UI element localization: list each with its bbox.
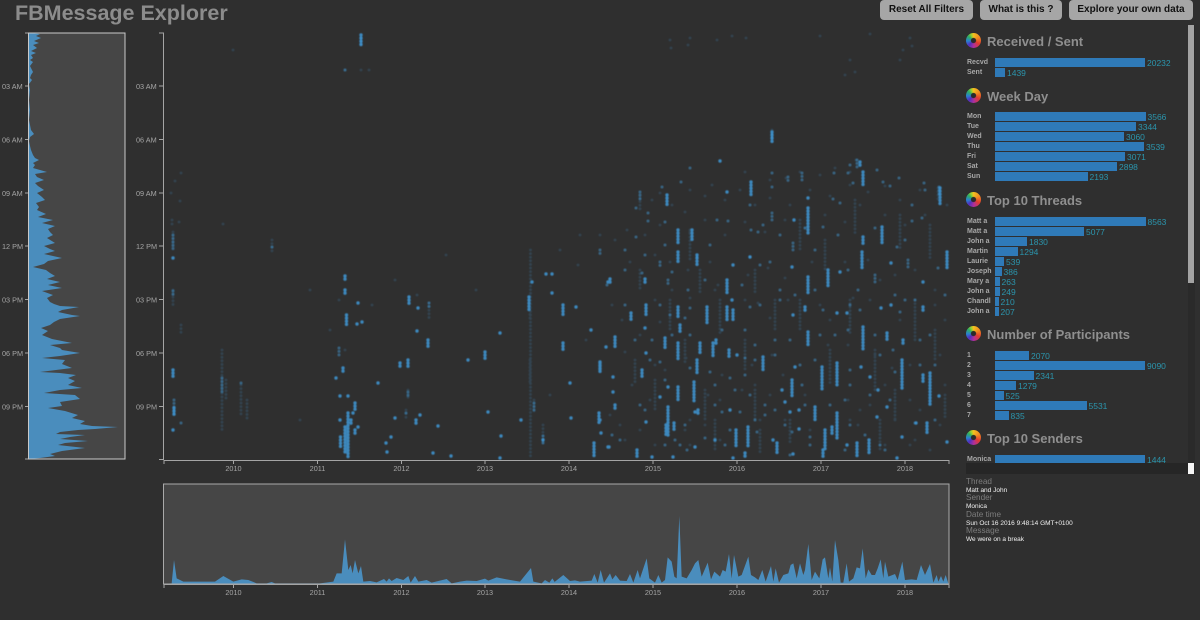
panel: filter charts: 9090 [1147,361,1166,371]
panel: filter charts: 7 [967,412,971,419]
dim scatter [171,34,947,457]
panel: filter charts: Matt a [967,218,987,225]
timeline x axis: 2016 [729,588,745,597]
heading: top 10 senders: Top 10 Senders [987,431,1083,446]
panel: filter charts: Sat [967,163,978,170]
main plot x axis: 2011 [310,464,325,473]
panel: message details [966,477,1073,543]
heading: number of participants: Number of Participants [987,327,1130,342]
button: explore your own data: Explore your own data [1077,4,1185,15]
value: sender: Monica [966,503,987,510]
panel: filter charts: 525 [1006,391,1020,401]
panel: filter charts: 2341 [1036,371,1054,381]
panel: filter charts: 5 [967,392,971,399]
label: thread: Thread [966,477,992,486]
panel: filter charts: 835 [1010,411,1025,421]
panel: filter charts: Matt a [967,228,987,235]
panel: filter charts: 1830 [1029,237,1048,247]
panel: filter charts: 5531 [1088,401,1107,411]
panel: filter charts: 2070 [1031,351,1050,361]
chart: week day [967,112,1166,182]
main plot x axis: 2010 [225,464,242,473]
main plot x axis: 2018 [897,464,913,473]
main plot y axis: 06 PM [136,349,157,358]
timeline x axis: 2011 [310,588,325,597]
button: what is this [980,0,1062,20]
icon: colour wheel week day [966,88,981,103]
panel: filter charts: 207 [1000,307,1015,317]
label: sender: Sender [966,493,992,502]
button: reset filters [880,0,973,20]
panel: filter charts: 3566 [1148,112,1166,122]
main plot y axis [136,33,164,460]
panel: filter charts: Martin [967,248,988,255]
panel: filter charts [966,33,1171,465]
main plot y axis: 12 PM [136,242,157,251]
histogram y axis: 09 PM [2,402,23,412]
panel: filter charts: Chandl [967,298,991,305]
chart: top 10 senders [967,455,1166,465]
panel: filter charts: 5077 [1086,227,1105,237]
icon: colour wheel participants [966,326,981,341]
main plot y axis: 09 AM [136,189,157,198]
panel: filter charts: Sent [967,69,982,76]
main plot x axis [164,460,949,473]
panel: filter charts: 386 [1004,267,1018,277]
main plot x axis: 2015 [645,464,661,473]
heading: week day: Week Day [987,89,1048,104]
main plot y axis: 09 PM [136,402,157,412]
panel: filter charts: 249 [1002,287,1016,297]
timeline x axis: 2010 [225,588,242,597]
panel: filter charts: Fri [967,153,976,160]
panel: filter charts: 263 [1002,277,1016,287]
panel: filter charts: 3060 [1126,132,1145,142]
main plot x axis: 2012 [393,464,410,473]
main plot x axis: 2013 [477,464,493,473]
chart: number of participants [967,351,1166,421]
panel: filter charts: 539 [1006,257,1020,267]
timeline x axis [164,584,949,597]
title: FBMessage Explorer [15,1,228,25]
histogram y axis: 03 PM [2,296,23,304]
horizontal scrollbar [966,463,1195,474]
main plot x axis: 2017 [813,464,829,473]
label: message: Message [966,526,999,535]
timeline x axis: 2013 [477,588,493,597]
panel: filter charts: Tue [967,123,979,130]
main scatter plot of messages [171,34,947,458]
medium scatter [173,38,945,455]
bright streaks [173,35,947,458]
main plot y axis: 03 AM [136,82,157,91]
button: explore your own data [1069,0,1193,20]
label: date time: Date time [966,510,1001,519]
panel: filter charts: 2 [967,362,971,369]
chart: top 10 threads [967,217,1166,317]
timeline x axis: 2014 [561,588,577,597]
icon: colour wheel senders [966,430,981,445]
panel: filter charts: 1 [967,352,971,359]
panel: filter charts: 1294 [1020,247,1038,257]
panel: filter charts: 210 [1000,297,1015,307]
panel: filter charts: Monica [967,456,991,463]
panel: filter charts: 6 [967,402,971,409]
timeline x axis: 2017 [813,588,829,597]
histogram y axis: 03 AM [2,82,23,91]
timeline x axis: 2015 [645,588,661,597]
icon: colour wheel received/sent [966,33,981,48]
histogram y axis: 12 PM [2,242,23,251]
panel: filter charts: Thu [967,143,980,150]
heading: received / sent: Received / Sent [987,34,1083,49]
panel: filter charts: 3071 [1127,152,1146,162]
hour-of-day histogram [28,33,125,459]
value: thread: Matt and John [966,487,1007,494]
value: date time: Sun Oct 16 2016 9:48:14 GMT+0100 [966,520,1073,527]
panel: filter charts: 4 [967,382,971,389]
vertical scrollbar [1188,25,1195,463]
timeline x axis: 2012 [393,588,410,597]
histogram y axis: 06 PM [2,349,23,358]
panel: filter charts: 3 [967,372,971,379]
panel: filter charts: 3344 [1138,122,1157,132]
panel: filter charts: 2898 [1119,162,1138,172]
histogram y axis: 06 AM [2,136,23,144]
value: message: We were on a break [966,536,1024,543]
panel: filter charts: 1279 [1018,381,1037,391]
timeline brush area chart [164,484,949,584]
main plot x axis: 2014 [561,464,577,473]
panel: filter charts: 20232 [1147,58,1171,68]
panel: filter charts: Sun [967,173,980,180]
panel: filter charts: 1444 [1147,455,1166,465]
heading: top 10 threads: Top 10 Threads [987,193,1082,208]
histogram y axis: 09 AM [2,189,23,198]
chart: received / sent [967,58,1171,78]
main plot y axis: 06 AM [136,136,157,144]
main plot x axis: 2016 [729,464,745,473]
button: what is this: What is this ? [988,4,1054,15]
main plot y axis: 03 PM [136,296,157,304]
icon: colour wheel top threads [966,192,981,207]
button: reset filters: Reset All Filters [889,4,964,15]
panel: filter charts: 1439 [1007,68,1026,78]
panel: filter charts: Joseph [967,268,992,275]
histogram y axis [2,33,28,459]
timeline x axis: 2018 [897,588,913,597]
panel: filter charts: Mon [967,113,981,120]
panel: filter charts: John a [967,238,990,245]
panel: filter charts: 8563 [1148,217,1166,227]
panel: filter charts: Wed [967,133,982,140]
panel: filter charts: John a [967,288,990,295]
panel: filter charts: 3539 [1146,142,1165,152]
panel: filter charts: Recvd [967,59,988,66]
panel: filter charts: John a [967,308,990,315]
panel: filter charts: Laurie [967,258,988,265]
panel: filter charts: Mary a [967,278,989,285]
panel: filter charts: 2193 [1090,172,1108,182]
